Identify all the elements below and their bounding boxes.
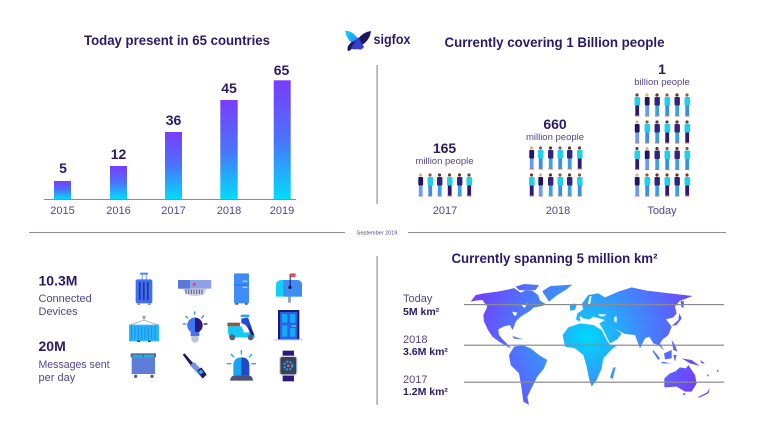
stat: messages: Messages sent xyxy=(38,359,110,371)
bar chart: countries per year: 36 xyxy=(166,112,181,128)
icon: fridge xyxy=(234,273,249,305)
stat: connected devices: Devices xyxy=(38,306,78,318)
group: 2017 people: 165 xyxy=(433,140,456,156)
group: 2018 people: 660 xyxy=(543,116,567,132)
icon: dumpster xyxy=(131,353,156,378)
icon: sigfox butterfly xyxy=(345,31,371,51)
stat: messages xyxy=(38,338,110,384)
world map xyxy=(471,284,719,405)
group: today people: Today xyxy=(647,205,677,217)
logo: sigfox xyxy=(345,31,411,51)
stat: connected devices: Connected xyxy=(38,293,92,305)
group: 2017 people: million people xyxy=(415,156,474,167)
bar chart: countries per year: 2016 xyxy=(106,205,131,217)
bar chart: countries per year: 5 xyxy=(59,160,67,176)
map labels: 3.6M km² xyxy=(403,346,448,358)
bar chart: countries per year: 2017 xyxy=(161,205,186,217)
stat: messages: 20M xyxy=(38,338,66,354)
icon: suitcase xyxy=(136,273,152,305)
group: 2018 people: million people xyxy=(526,132,584,143)
stat: messages: per day xyxy=(38,372,76,384)
group: 2018 people: 2018 xyxy=(546,205,570,217)
group: today people: 1 xyxy=(658,61,666,77)
icon: mailbox xyxy=(276,273,302,303)
icon: smart watch xyxy=(280,351,297,381)
bar chart: countries per year: 2018 xyxy=(217,205,241,217)
heading: spanning: Currently spanning 5 million km² xyxy=(452,250,658,266)
panel: countries xyxy=(44,32,296,217)
group: 2017 people: 2017 xyxy=(433,205,457,217)
heading: countries: Today present in 65 countries xyxy=(84,32,270,48)
group: 2018 people xyxy=(526,116,584,217)
panel: people coverage xyxy=(415,34,690,217)
latitude lines xyxy=(464,304,724,383)
map: americas and greenland xyxy=(471,284,577,405)
stat: connected devices: 10.3M xyxy=(38,272,77,288)
wordmark: sigfox xyxy=(374,32,411,47)
group: today people: billion people xyxy=(634,77,690,88)
map labels xyxy=(403,293,448,398)
stat: connected devices xyxy=(38,272,92,318)
bar chart: countries per year: 65 xyxy=(274,62,289,78)
map labels: 2017 xyxy=(403,374,427,386)
heading: people: Currently covering 1 Billion people xyxy=(444,34,665,50)
map labels: 2018 xyxy=(403,334,427,346)
bar chart: countries per year: 2019 xyxy=(270,205,294,217)
group: today people xyxy=(634,61,690,217)
icon grid: connected objects xyxy=(129,273,303,381)
group: 2017 people xyxy=(415,140,474,217)
icon: scooter xyxy=(227,315,255,340)
icon: sensor probe xyxy=(183,353,207,379)
map labels: 1.2M km² xyxy=(403,386,448,398)
icon: shipping container xyxy=(129,316,159,342)
map: eurasia africa oceania xyxy=(563,287,719,397)
bar chart: countries per year: 45 xyxy=(221,80,237,96)
panel: devices xyxy=(38,272,303,384)
map labels: Today xyxy=(403,293,433,305)
icon: door xyxy=(275,310,303,341)
icon: smoke detector xyxy=(178,280,211,296)
panel: coverage map xyxy=(403,250,724,405)
date label: September 2019 xyxy=(357,230,397,236)
bar chart: countries per year xyxy=(44,62,296,217)
icon: alarm beacon xyxy=(227,350,256,381)
map labels: 5M km² xyxy=(403,306,440,318)
bar chart: countries per year: 2015 xyxy=(50,205,75,217)
icon: light bulb xyxy=(183,311,207,343)
bar chart: countries per year: 12 xyxy=(111,146,126,162)
